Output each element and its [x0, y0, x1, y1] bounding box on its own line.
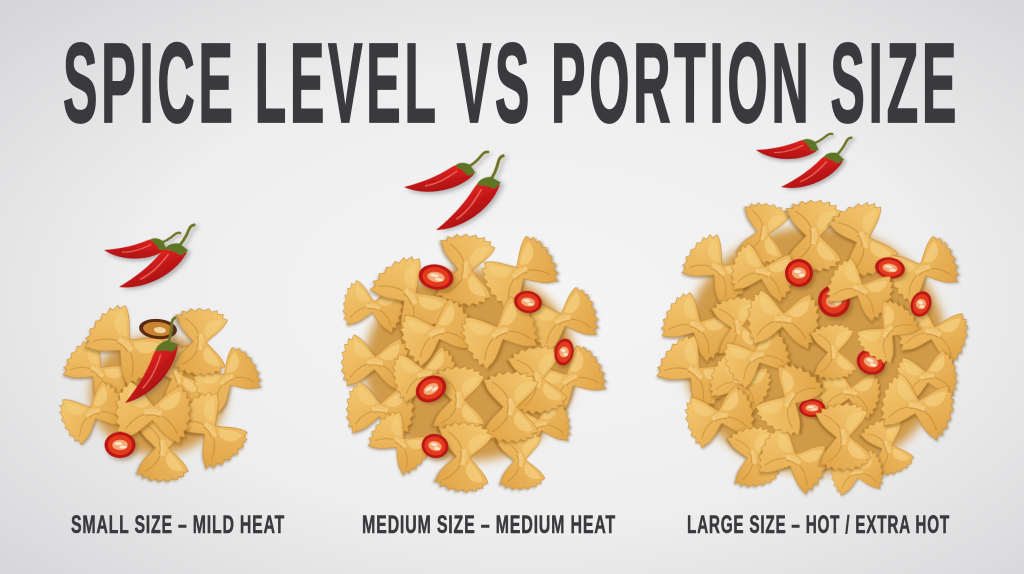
label: small size: SMALL SIZE – MILD HEAT — [71, 511, 285, 539]
icon: two chillies, small portion — [104, 225, 208, 295]
chilli slice: dark ring — [138, 317, 178, 341]
panel: large portion — [650, 128, 972, 539]
pasta pile: small — [54, 298, 267, 482]
pasta pile: medium — [339, 230, 612, 494]
chilli slice: red — [104, 432, 136, 458]
pasta pile: large — [650, 197, 972, 497]
icon: two chillies, large portion — [755, 128, 861, 194]
panel: medium portion — [339, 152, 616, 539]
icon: whole chilli on pasta — [106, 318, 200, 409]
chilli slices: medium — [411, 262, 576, 461]
chilli slices: large — [785, 255, 935, 417]
panel: small portion — [54, 225, 285, 539]
pasta pile: large, top layer — [745, 254, 924, 473]
label: medium size: MEDIUM SIZE – MEDIUM HEAT — [362, 511, 616, 539]
icon: two chillies, medium portion — [401, 152, 522, 237]
